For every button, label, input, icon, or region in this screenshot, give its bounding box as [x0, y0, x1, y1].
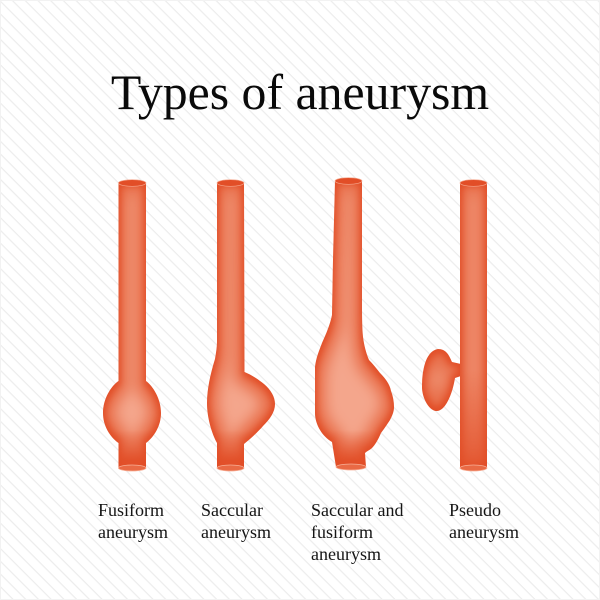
bottom opening — [336, 464, 366, 470]
label: saccular and fusiform aneurysm: fusiform — [311, 522, 373, 542]
label: saccular aneurysm: aneurysm — [201, 522, 271, 542]
vessel: saccular and fusiform aneurysm — [315, 178, 394, 470]
vessel: saccular aneurysm — [207, 180, 275, 471]
vessel: fusiform aneurysm — [103, 180, 161, 471]
bottom opening — [217, 465, 244, 471]
bottom opening — [460, 465, 487, 471]
top opening — [217, 180, 244, 186]
label: fusiform aneurysm: aneurysm — [98, 522, 168, 542]
label: pseudo aneurysm: Pseudo — [449, 500, 501, 520]
top opening — [118, 180, 146, 186]
label: fusiform aneurysm: Fusiform — [98, 500, 164, 520]
label: saccular and fusiform aneurysm: aneurysm — [311, 544, 381, 564]
vessel: pseudo aneurysm — [422, 180, 487, 471]
title: Types of aneurysm — [111, 65, 489, 120]
bottom opening — [118, 465, 146, 471]
top opening — [335, 178, 362, 184]
label: pseudo aneurysm: aneurysm — [449, 522, 519, 542]
label: saccular and fusiform aneurysm: Saccular and — [311, 500, 403, 520]
top opening — [460, 180, 487, 186]
label: saccular aneurysm: Saccular — [201, 500, 263, 520]
